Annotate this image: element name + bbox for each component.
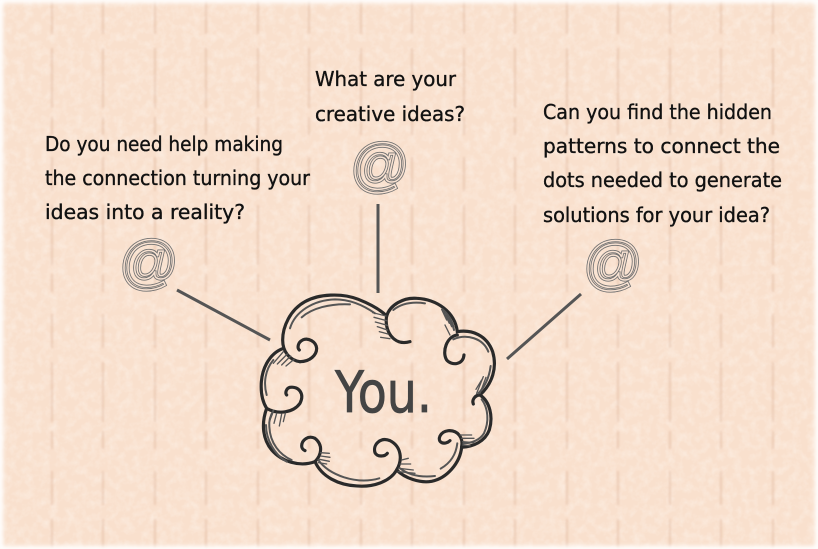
icon: at sign left: @ xyxy=(119,230,177,295)
cloud inner strokes xyxy=(265,299,491,480)
text block: center question xyxy=(315,67,465,126)
icon: at sign center: @ xyxy=(350,133,408,198)
icon: at sign left: @ xyxy=(119,230,177,295)
text block: center question: creative ideas? xyxy=(315,102,465,126)
text block: right question xyxy=(543,100,782,227)
text block: right question: Can you find the hidden xyxy=(543,100,772,124)
text block: left question: the connection turning your xyxy=(45,166,311,190)
icon: cloud xyxy=(261,295,494,486)
text block: left question: ideas into a reality? xyxy=(45,200,245,224)
text block: right question: dots needed to generate xyxy=(543,168,782,192)
label: You.: You. xyxy=(334,360,432,426)
text block: left question: Do you need help making xyxy=(45,132,283,156)
icon: at sign center: @ xyxy=(350,133,408,198)
icon: at sign right: @ xyxy=(583,231,641,296)
icon: at sign right: @ xyxy=(583,231,641,296)
text block: right question: patterns to connect the xyxy=(543,134,780,158)
text block: center question: What are your xyxy=(315,67,457,91)
cloud hatching xyxy=(270,309,486,473)
connector line: left xyxy=(177,290,270,340)
connector line: center xyxy=(376,204,380,293)
text block: right question: solutions for your idea? xyxy=(543,203,770,227)
text block: left question xyxy=(45,132,311,224)
cloud outline xyxy=(261,295,494,486)
connector line: right xyxy=(507,294,581,359)
